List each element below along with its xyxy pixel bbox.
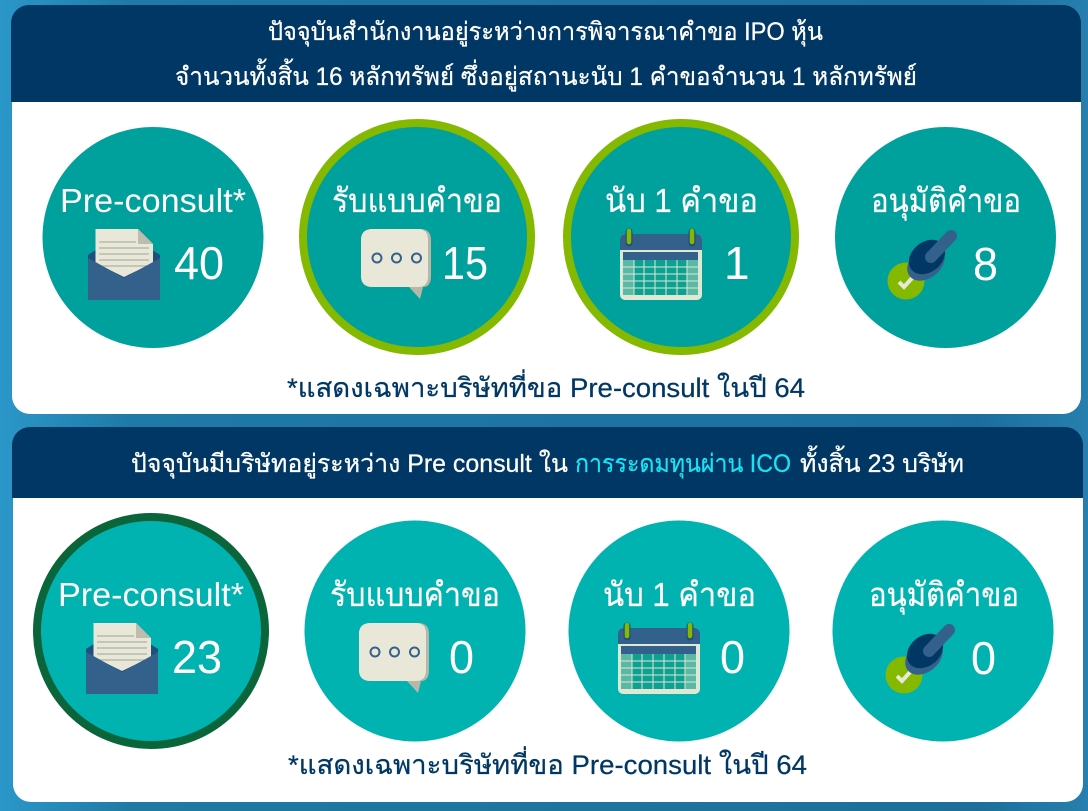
stat: received 0 xyxy=(304,520,526,742)
value: 0 xyxy=(971,632,996,684)
panel body xyxy=(13,445,1083,802)
icon: approval stamp xyxy=(888,233,952,300)
value: 1 xyxy=(724,237,750,289)
panel body xyxy=(12,20,1081,414)
stat: pre-consult 23 xyxy=(37,517,265,745)
value: 23 xyxy=(172,631,222,683)
header text: ปัจจุบันมีบริษัทอยู่ระหว่าง Pre consult ใน xyxy=(131,449,568,479)
header text xyxy=(131,445,964,479)
stat: filed 1: นับ 1 คำขอ xyxy=(605,182,758,219)
icon: calendar xyxy=(620,231,702,300)
value: 8 xyxy=(973,238,998,290)
header band xyxy=(11,5,1081,102)
icon: approval stamp xyxy=(886,627,950,694)
stat: approved 8: อนุมัติคำขอ xyxy=(871,182,1021,221)
highlighted text: การระดมทุนผ่าน ICO xyxy=(575,450,791,479)
stat: approved 8 xyxy=(835,127,1056,348)
value: 0 xyxy=(720,631,745,683)
stat: filed 0: นับ 1 คำขอ xyxy=(603,576,756,613)
panel: ICO fundraising xyxy=(12,427,1083,802)
stat: pre-consult 23: Pre-consult* xyxy=(58,576,244,613)
stat: received 0: รับแบบคำขอ xyxy=(330,576,500,613)
icon: envelope xyxy=(88,229,160,300)
icon: speech bubble xyxy=(359,623,429,693)
value: 0 xyxy=(449,631,474,683)
header text: ทั้งสิ้น 23 บริษัท xyxy=(800,445,964,478)
stat: received 15 xyxy=(303,123,531,351)
icon: speech bubble xyxy=(361,229,431,299)
header text line 1: ปัจจุบันสำนักงานอยู่ระหว่างการพิจารณาคำขอ IPO หุ้น xyxy=(268,18,823,47)
stat: approved 0: อนุมัติคำขอ xyxy=(869,576,1019,615)
footnote: *แสดงเฉพาะบริษัทที่ขอ Pre-consult ในปี 64 xyxy=(288,746,807,780)
stat: approved 0 xyxy=(832,520,1054,742)
value: 40 xyxy=(174,237,224,289)
footnote: *แสดงเฉพาะบริษัทที่ขอ Pre-consult ในปี 64 xyxy=(287,369,805,403)
stat: filed 0 xyxy=(568,520,790,742)
stat: filed 1 xyxy=(567,123,795,351)
stat: pre-consult 40 xyxy=(42,127,264,348)
value: 15 xyxy=(442,237,488,289)
header band xyxy=(12,427,1083,498)
icon: envelope xyxy=(86,623,158,694)
panel: IPO shares xyxy=(11,5,1081,414)
stat: received 15: รับแบบคำขอ xyxy=(332,182,502,219)
header text line 2: จำนวนทั้งสิ้น 16 หลักทรัพย์ ซึ่งอยู่สถานะนับ 1 คำขอจำนวน 1 หลักทรัพย์ xyxy=(175,58,917,92)
icon: calendar xyxy=(618,625,700,694)
stat: pre-consult 40: Pre-consult* xyxy=(60,182,246,219)
